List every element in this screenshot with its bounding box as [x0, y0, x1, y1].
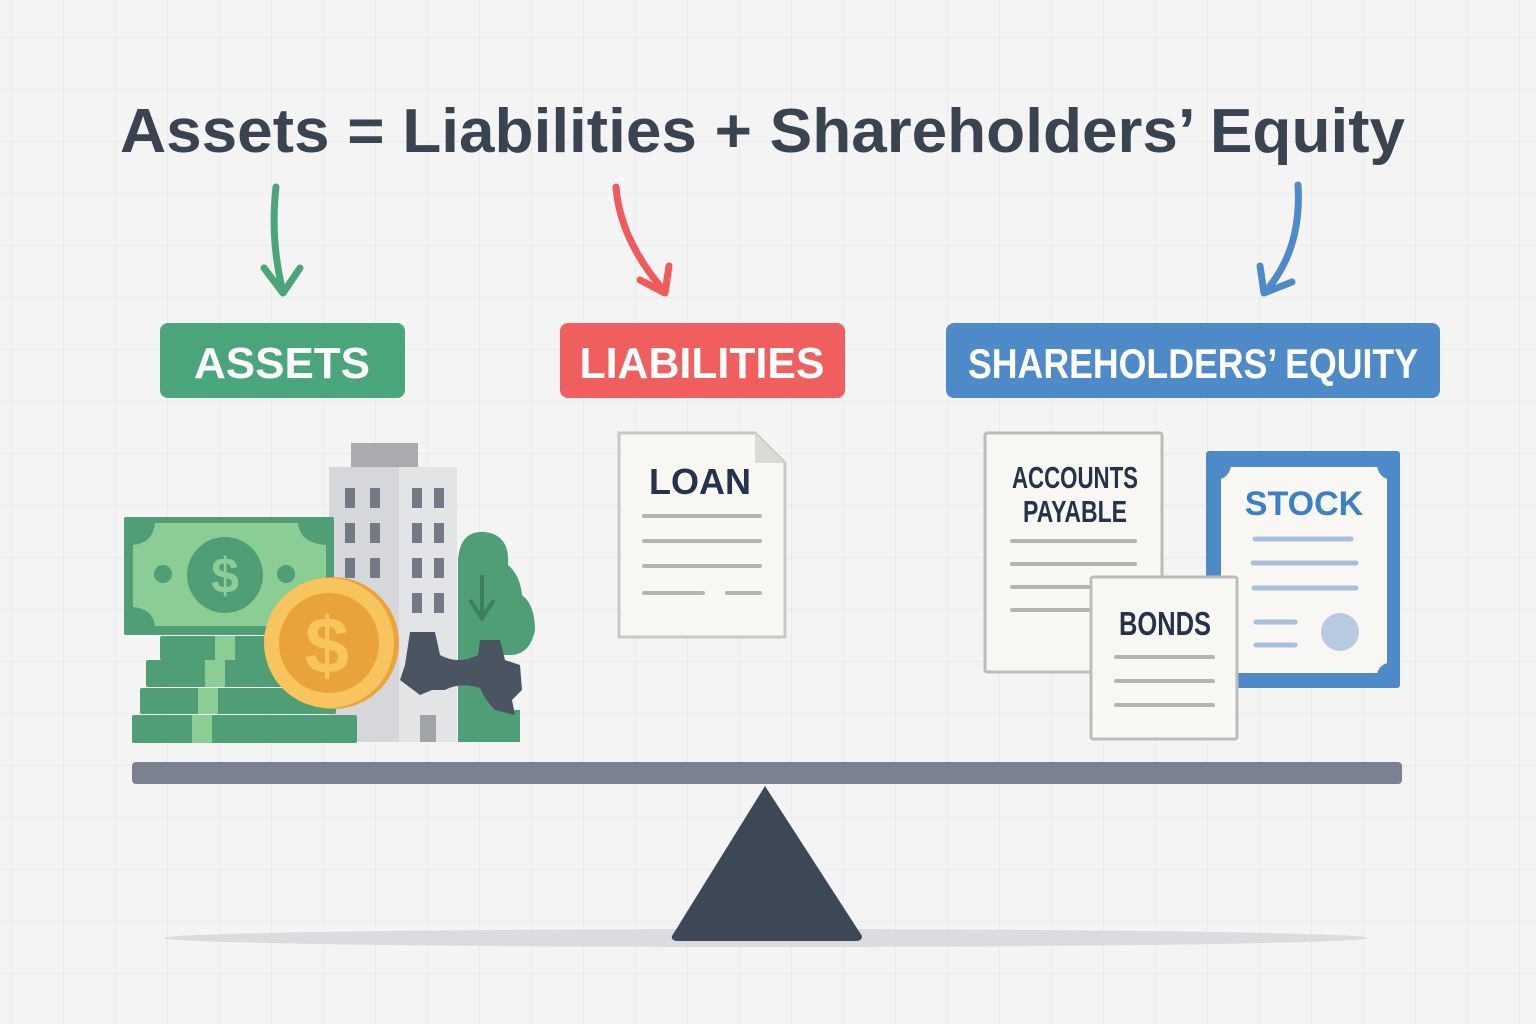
ground shadow [164, 929, 1368, 947]
icon: accounts payable document: ACCOUNTS [1012, 460, 1138, 495]
icon group: assets (cash, coin, building, tree, gear) [124, 443, 535, 743]
icon: accounts payable document [985, 433, 1162, 672]
icon: building [329, 443, 457, 742]
arrow: liabilities [616, 187, 669, 293]
icon: bonds document: BONDS [1119, 605, 1211, 642]
icon: cash stack [124, 517, 357, 743]
icon: loan document [619, 433, 785, 637]
label: liabilities [560, 323, 845, 398]
icon: gear [400, 632, 522, 715]
balance beam [132, 762, 1402, 784]
icon: coin [264, 577, 399, 709]
arrow: equity [1260, 185, 1298, 293]
icon: cash stack: $ [211, 548, 239, 604]
label: liabilities: LIABILITIES [580, 339, 824, 388]
icon: loan document: LOAN [649, 461, 751, 502]
label: assets: ASSETS [194, 339, 370, 388]
icon: stock certificate: STOCK [1245, 485, 1364, 523]
icon: accounts payable document: PAYABLE [1023, 494, 1127, 529]
arrow: assets [264, 187, 300, 293]
fulcrum [672, 786, 862, 941]
label: shareholders equity [946, 323, 1440, 398]
icon: tree [458, 532, 535, 742]
label: assets [160, 323, 405, 398]
icon: stock certificate [1206, 451, 1400, 688]
title: Assets = Liabilities + Shareholders’ Equity [120, 97, 1406, 166]
icon: bonds document [1091, 577, 1237, 739]
icon: coin: $ [305, 601, 349, 690]
label: shareholders equity: SHAREHOLDERS’ EQUITY [968, 340, 1418, 387]
